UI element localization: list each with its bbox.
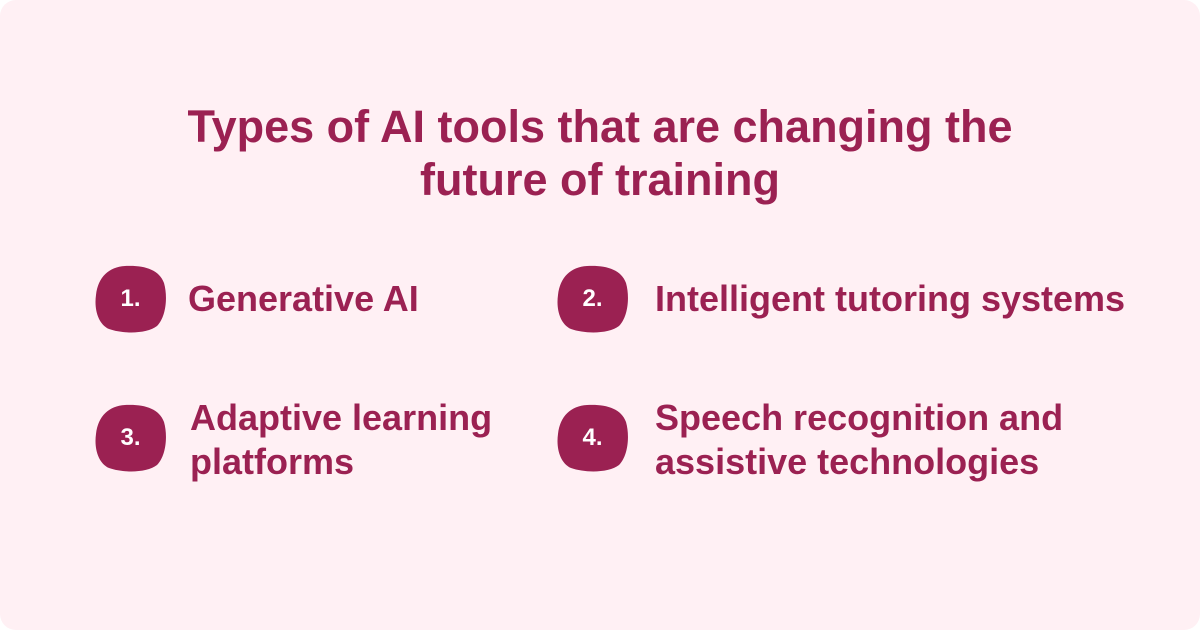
title — [187, 101, 1013, 205]
text 4: Speech recognition and — [655, 397, 1063, 438]
text 4: assistive technologies — [655, 441, 1039, 482]
icon: blob 1 — [96, 266, 166, 332]
text 1: Generative AI — [188, 278, 419, 319]
title: future of training — [420, 154, 780, 205]
icon: blob 4 — [558, 404, 628, 472]
icon: blob 3 — [96, 404, 166, 472]
icon: blob 3: 3. — [120, 424, 140, 451]
title: Types of AI tools that are changing the — [187, 101, 1013, 152]
icon: blob 1: 1. — [120, 285, 140, 312]
item 1 — [96, 266, 419, 332]
item 3 — [96, 397, 492, 482]
item 4 — [558, 397, 1063, 482]
item 2 — [558, 266, 1125, 332]
text 2: Intelligent tutoring systems — [655, 278, 1125, 319]
icon: blob 2: 2. — [582, 285, 602, 312]
icon: blob 2 — [558, 266, 628, 332]
icon: blob 4: 4. — [582, 424, 602, 451]
text 4 — [655, 397, 1063, 482]
text 3: platforms — [190, 441, 354, 482]
text 3: Adaptive learning — [190, 397, 492, 438]
text 3 — [190, 397, 492, 482]
